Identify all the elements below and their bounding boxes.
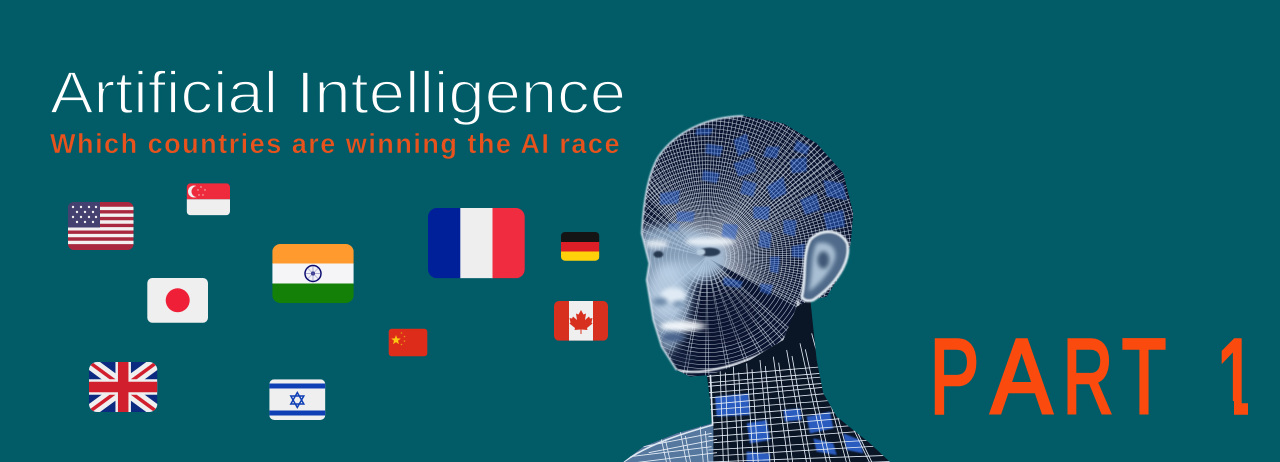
head mesh [642,116,854,376]
flag: Canada [554,301,608,341]
part label: P [930,318,979,436]
flag: Israel [269,379,325,420]
title: Artificial Intelligence [50,60,626,126]
eyes [653,248,720,258]
subtitle: Which countries are winning the AI race [50,128,621,159]
jaw line [677,300,798,372]
flag: Germany [561,232,599,261]
flag: Singapore [187,183,230,215]
flag: India [272,244,354,304]
flag: Japan [147,278,208,323]
part label: A [991,318,1052,436]
banner [50,70,1248,462]
flag: France [428,208,525,278]
neck and shoulders [624,301,890,462]
flag: China [389,329,427,356]
flag: United States [68,202,134,250]
part label: T [1122,318,1166,436]
ear [802,232,848,301]
part label: 1 [1216,318,1256,436]
radial mesh lines [642,116,854,376]
face glow [640,226,755,366]
wireframe head illustration [624,114,890,462]
blue mesh patches [660,128,847,295]
flag: United Kingdom [89,362,157,412]
head rim highlight [642,116,743,370]
part label [930,318,1256,436]
part label: R [1063,318,1113,436]
concentric mesh lines [642,116,854,376]
